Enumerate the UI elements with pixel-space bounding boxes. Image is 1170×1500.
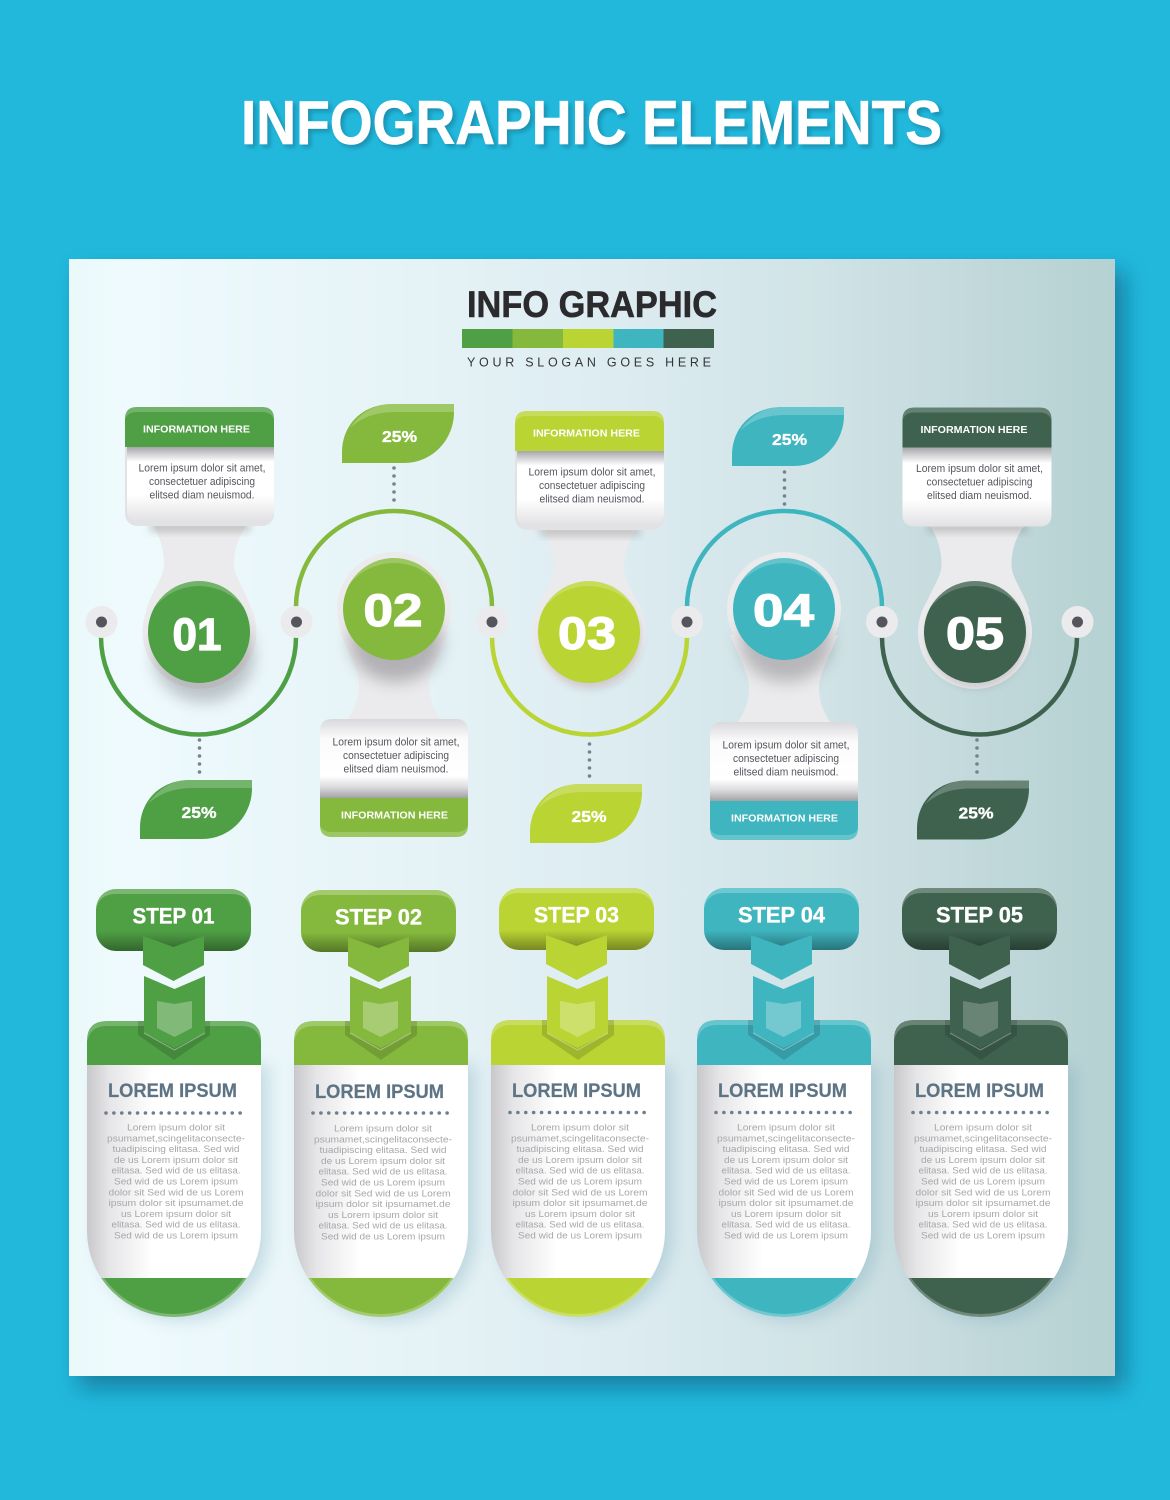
percentage leaf 02: 25% [382,429,417,446]
step 04 text: elitasa. Sed wid de us elitasa. [722,1166,850,1177]
step 05 text: Sed wid de us Lorem ipsum [921,1176,1045,1188]
step 02 text: Lorem ipsum dolor sit [334,1124,432,1134]
step 01 text: de us Lorem ipsum dolor sit [114,1155,238,1166]
step 04 text: Lorem ipsum dolor sit [737,1122,835,1134]
info card 04: INFORMATION HERE [731,812,838,824]
info card 01: Lorem ipsum dolor sit amet, [138,462,266,474]
step 04 text: Sed wid de us Lorem ipsum [724,1230,848,1242]
info card 04: Lorem ipsum dolor sit amet, [722,740,850,752]
info card 02 [320,719,468,837]
percentage leaf 01: 25% [182,805,216,822]
step 05 text [913,1080,1055,1242]
step 01 text: LOREM IPSUM [108,1080,237,1102]
step 05 pill: STEP 05 [936,902,1023,928]
step 05 text: tuadipiscing elitasa. Sed wid [920,1144,1046,1155]
info card 02: consectetuer adipiscing [343,750,449,762]
info card 02: Lorem ipsum dolor sit amet, [332,736,460,748]
percentage leaf 04 [732,407,844,466]
step 02 text: tuadipiscing elitasa. Sed wid [320,1145,446,1156]
step 03 text: de us Lorem ipsum dolor sit [518,1155,642,1166]
step 02 text: elitasa. Sed wid de us elitasa. [318,1221,448,1232]
step 01 text: elitasa. Sed wid de us elitasa. [112,1220,240,1231]
halo [532,575,646,689]
step 05 text: ipsum dolor sit ipsumamet.de [916,1198,1050,1209]
step 02 text: dolor sit Sed wid de us Lorem [316,1188,451,1199]
halo [337,552,451,666]
item 04 node and card [710,552,858,840]
panel: step 04 [697,888,879,1321]
step 03 text: us Lorem ipsum dolor sit [525,1209,635,1220]
step 05 body [894,1020,1068,1317]
info card 05: Lorem ipsum dolor sit amet, [916,463,1043,475]
step 05 text: elitasa. Sed wid de us elitasa. [918,1166,1048,1177]
info card 04: elitsed diam neuismod. [734,766,838,778]
percentage leaf 02 [342,404,454,463]
info card 03: consectetuer adipiscing [539,480,645,492]
step 02 pill [301,890,456,982]
step 01 text: Sed wid de us Lorem ipsum [114,1230,238,1242]
step 01 text: ipsum dolor sit ipsumamet.de [108,1198,244,1209]
percentage leaf 03: 25% [572,809,606,826]
slogan: YOUR SLOGAN GOES HERE [467,356,711,370]
percentage leaf 05 [917,780,1029,840]
circle 01 [148,581,250,683]
step 01 pill [96,889,251,951]
step 02 text: psumamet,scingelitaconsecte- [314,1134,452,1145]
halo [727,552,841,666]
step 03 pill [499,888,654,980]
step 02 pill: STEP 02 [335,904,422,930]
step 04 pill: STEP 04 [738,902,826,928]
step 04 text [716,1080,858,1242]
panel: infographic sheet [69,259,1115,1376]
step 03 arrow [542,976,614,1060]
step 01 pill: STEP 01 [132,904,214,928]
item 01 node and card [125,407,274,702]
step 03 text: psumamet,scingelitaconsecte- [511,1133,649,1144]
neck [536,528,642,615]
circle 05: 05 [946,608,1004,659]
info card 01: INFORMATION HERE [143,424,250,436]
step 04 text: dolor sit Sed wid de us Lorem [718,1187,854,1198]
info card 04: consectetuer adipiscing [733,753,839,765]
dotted connectors [200,468,977,778]
info card 03: elitsed diam neuismod. [540,494,644,506]
info card 02: INFORMATION HERE [341,810,448,822]
step 01 body [87,1021,261,1317]
info card 03: INFORMATION HERE [533,428,640,440]
neck [730,635,838,723]
step 05 text: us Lorem ipsum dolor sit [928,1209,1038,1220]
step 04 text: de us Lorem ipsum dolor sit [724,1155,848,1166]
step 05 text: de us Lorem ipsum dolor sit [921,1155,1045,1166]
step 04 text: elitasa. Sed wid de us elitasa. [722,1220,850,1231]
percentage leaf 05: 25% [958,806,994,822]
step 03 text: LOREM IPSUM [512,1080,641,1102]
step 05 pill [902,888,1057,980]
step 03 text: ipsum dolor sit ipsumamet.de [512,1198,648,1209]
info card 01 [125,407,274,526]
step 05 text: LOREM IPSUM [915,1080,1044,1102]
heading text: INFO GRAPHIC [467,284,717,325]
step 01 text: Sed wid de us Lorem ipsum [114,1176,238,1188]
step 05 text: Lorem ipsum dolor sit [934,1122,1032,1134]
step 04 body [697,1020,871,1317]
item 02 node and card [320,552,468,837]
step 02 text: us Lorem ipsum dolor sit [328,1210,438,1221]
main title: INFOGRAPHIC ELEMENTS [241,89,942,158]
heading: info graphic [462,284,717,370]
step 02 text: de us Lorem ipsum dolor sit [321,1156,445,1167]
info card 04 [710,722,858,840]
neck [340,632,448,720]
step 01 text [106,1080,248,1242]
circle 05 [924,581,1026,683]
step 03 text [510,1080,652,1242]
circle 01: 01 [172,609,222,660]
step 03 body [491,1020,665,1317]
step 03 pill: STEP 03 [534,902,619,928]
step 03 text: Lorem ipsum dolor sit [531,1122,629,1134]
step 02 text: LOREM IPSUM [315,1081,444,1103]
circle 02 [343,558,445,660]
step 05 text: dolor sit Sed wid de us Lorem [916,1187,1051,1198]
step 03 text: elitasa. Sed wid de us elitasa. [516,1220,644,1231]
colour bar [462,329,714,348]
step 01 text: Lorem ipsum dolor sit [127,1122,225,1134]
timeline arcs [101,511,1077,734]
step 03 text: dolor sit Sed wid de us Lorem [512,1187,648,1198]
item 05 node and card [902,408,1052,689]
halo [918,575,1032,689]
step 02 text: ipsum dolor sit ipsumamet.de [316,1199,450,1210]
step 04 text: LOREM IPSUM [718,1080,847,1102]
step 03 text: elitasa. Sed wid de us elitasa. [516,1166,644,1177]
step 01 text: tuadipiscing elitasa. Sed wid [112,1144,240,1155]
step 01 text: dolor sit Sed wid de us Lorem [108,1187,244,1198]
step 01 text: psumamet,scingelitaconsecte- [107,1133,245,1144]
circle 04 [733,558,835,660]
percentage leaf 03 [530,784,642,843]
percentage leaf 01 [140,780,252,839]
info card 05: INFORMATION HERE [920,424,1028,436]
panel: step 02 [294,890,476,1321]
step 05 arrow [945,976,1017,1060]
neck [924,524,1030,612]
step 02 text: elitasa. Sed wid de us elitasa. [318,1167,448,1178]
info card 01: consectetuer adipiscing [149,476,255,488]
info card 03 [515,411,664,530]
step 03 text: Sed wid de us Lorem ipsum [518,1176,642,1188]
step 04 arrow [748,976,820,1060]
step 02 body [294,1021,468,1317]
step 04 text: ipsum dolor sit ipsumamet.de [718,1198,854,1209]
step 02 text: Sed wid de us Lorem ipsum [321,1178,445,1188]
step 01 text: us Lorem ipsum dolor sit [121,1209,231,1220]
panel: step 05 [894,888,1076,1321]
step 05 text: elitasa. Sed wid de us elitasa. [918,1220,1048,1231]
info card 02: elitsed diam neuismod. [344,764,448,776]
step 03 text: Sed wid de us Lorem ipsum [518,1230,642,1242]
step 04 text: us Lorem ipsum dolor sit [731,1209,841,1220]
info card 05: elitsed diam neuismod. [927,490,1032,502]
neck [146,524,252,611]
step 04 text: Sed wid de us Lorem ipsum [724,1176,848,1188]
info card 03: Lorem ipsum dolor sit amet, [528,466,656,478]
circle 03: 03 [558,608,616,659]
info card 01: elitsed diam neuismod. [150,490,254,502]
panel: step 03 [491,888,673,1321]
panel: step 01 [87,889,269,1321]
circle 02: 02 [364,585,422,636]
halo [142,575,256,689]
circle 03 [538,581,640,683]
info card 05 [902,408,1052,526]
step 04 text: psumamet,scingelitaconsecte- [717,1133,855,1144]
step 05 text: psumamet,scingelitaconsecte- [914,1133,1052,1144]
step 01 text: elitasa. Sed wid de us elitasa. [112,1166,240,1177]
panel shadow [79,271,1125,1388]
step 02 text: Sed wid de us Lorem ipsum [321,1232,445,1242]
step 02 text [313,1081,455,1242]
step 05 text: Sed wid de us Lorem ipsum [921,1230,1045,1242]
circle 04: 04 [753,585,814,636]
step 03 text: tuadipiscing elitasa. Sed wid [516,1144,644,1155]
step 04 text: tuadipiscing elitasa. Sed wid [722,1144,850,1155]
item 03 node and card [515,411,664,689]
percentage leaf 04: 25% [772,432,807,449]
step 04 pill [704,888,859,980]
step 01 arrow [138,936,210,1060]
timeline nodes [86,606,1094,638]
info card 05: consectetuer adipiscing [926,476,1032,488]
step 02 arrow [345,976,417,1060]
